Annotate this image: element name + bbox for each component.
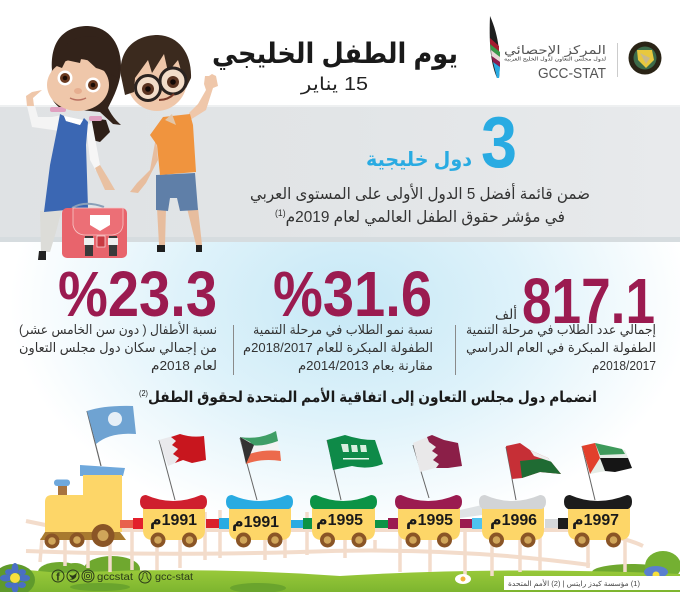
stat: 23.3 percent children — [19, 258, 217, 373]
train engine — [40, 406, 136, 548]
icon: right flower — [644, 566, 668, 578]
subtitle: date: 15 يناير — [300, 74, 368, 95]
flag: UAE — [582, 443, 632, 500]
stat: 817.1 thousand students: 2018/2017م — [592, 358, 656, 373]
coupler: Oman to UAE — [460, 505, 568, 529]
background glow — [0, 240, 680, 592]
logo: GCC-STAT: لدول مجلس التعاون لدول الخليج العربية — [504, 56, 607, 62]
text: ranking statement: (1) — [275, 208, 286, 218]
flag: Qatar — [413, 435, 462, 498]
wagon: Bahrain 1991 — [140, 495, 207, 548]
footnote: sources: (1) مؤسسة كيدز رايتس | (2) الأمم المتحدة — [508, 579, 640, 588]
stat: 31.6 percent growth: %31.6 — [273, 258, 432, 330]
wagon: Saudi Arabia 1995: 1995م — [316, 512, 363, 529]
stat: 817.1 thousand students: إجمالي عدد الطلاب في مرحلة التنمية — [466, 322, 656, 338]
coupler: Bahrain to Kuwait — [206, 518, 229, 529]
stat: 31.6 percent growth: نسبة نمو الطلاب في مرحلة التنمية — [253, 322, 433, 338]
text: ranking statement: في مؤشر حقوق الطفل العالمي لعام 2019م — [286, 209, 574, 226]
flag: Saudi Arabia — [327, 435, 383, 500]
stat: 31.6 percent growth: الطفولة المبكرة للعام 2018/2017م — [243, 340, 433, 356]
stat: 817.1 thousand students: ألف — [495, 305, 517, 322]
social media handles — [52, 570, 193, 584]
railway track — [26, 510, 643, 576]
social media handles: f — [56, 572, 60, 584]
panel: grey band — [0, 105, 680, 242]
logo: GCC emblem — [628, 42, 662, 74]
stat: 23.3 percent children: من إجمالي سكان دول مجلس التعاون — [19, 340, 217, 356]
coupler: Qatar to Oman — [459, 518, 482, 529]
wagon: Bahrain 1991: 1991م — [150, 512, 197, 529]
footnote: sources — [504, 576, 680, 590]
text: ranking statement: ضمن قائمة أفضل 5 الدول الأولى على المستوى العربي — [250, 183, 590, 204]
divider — [233, 325, 234, 375]
flag: Kuwait — [240, 431, 281, 500]
text: ranking statement — [250, 183, 590, 227]
flag: Bahrain — [159, 434, 206, 500]
logo: GCC-STAT: GCC-STAT — [538, 65, 606, 82]
wagon: UAE 1997: 1997م — [572, 512, 619, 529]
grass hill — [0, 551, 680, 592]
logo: GCC-STAT: المركز الإحصائي — [504, 43, 606, 58]
illustration: school bag — [62, 204, 127, 258]
stat: 817.1 thousand students — [466, 265, 656, 373]
divider — [455, 325, 456, 375]
social media handles: gcc-stat — [155, 571, 193, 583]
wagon: Oman 1996: 1996م — [490, 512, 537, 529]
stat: 23.3 percent children: نسبة الأطفال ( دون سن الخامس عشر) — [19, 321, 217, 338]
stat: 817.1 thousand students: الطفولة المبكرة في العام الدراسي — [466, 340, 656, 356]
heading: convention on child rights: انضمام دول مجلس التعاون إلى اتفاقية الأمم المتحدة لحقوق الطفل — [148, 389, 639, 406]
wagon: Qatar 1995 — [395, 495, 462, 548]
wagon: Kuwait 1991 — [226, 495, 293, 548]
coupler: Kuwait to Saudi — [290, 518, 313, 529]
stat: 23.3 percent children: %23.3 — [58, 258, 217, 330]
stat: 817.1 thousand students: 817.1 — [522, 265, 655, 337]
label: gulf states: دول خليجية — [366, 149, 472, 171]
illustration: girl — [26, 26, 121, 260]
title: يوم الطفل الخليجي — [212, 38, 458, 70]
wagon: Qatar 1995: 1995م — [406, 512, 453, 529]
coupler: engine to Bahrain — [120, 518, 143, 529]
wagon: Saudi Arabia 1995 — [310, 495, 377, 548]
logo: GCC-STAT — [490, 16, 618, 82]
big number: 3: 3 — [481, 103, 517, 183]
stat: 31.6 percent growth: مقارنة بعام 2014/2013م — [298, 358, 433, 374]
wagon: Kuwait 1991: 1991م — [232, 514, 279, 531]
icon: left flower — [0, 563, 30, 592]
flag: Oman — [506, 443, 561, 500]
illustration: boy — [121, 35, 218, 252]
coupler: Saudi to Qatar — [375, 518, 398, 529]
wagon: Oman 1996 — [479, 495, 546, 548]
wagon: UAE 1997 — [564, 495, 632, 548]
icon: daisy — [455, 574, 471, 584]
social media handles: gccstat — [97, 571, 133, 583]
heading: convention on child rights: (2) — [139, 389, 148, 398]
stat: 31.6 percent growth — [243, 258, 433, 374]
stat: 23.3 percent children: لعام 2018م — [151, 358, 217, 373]
